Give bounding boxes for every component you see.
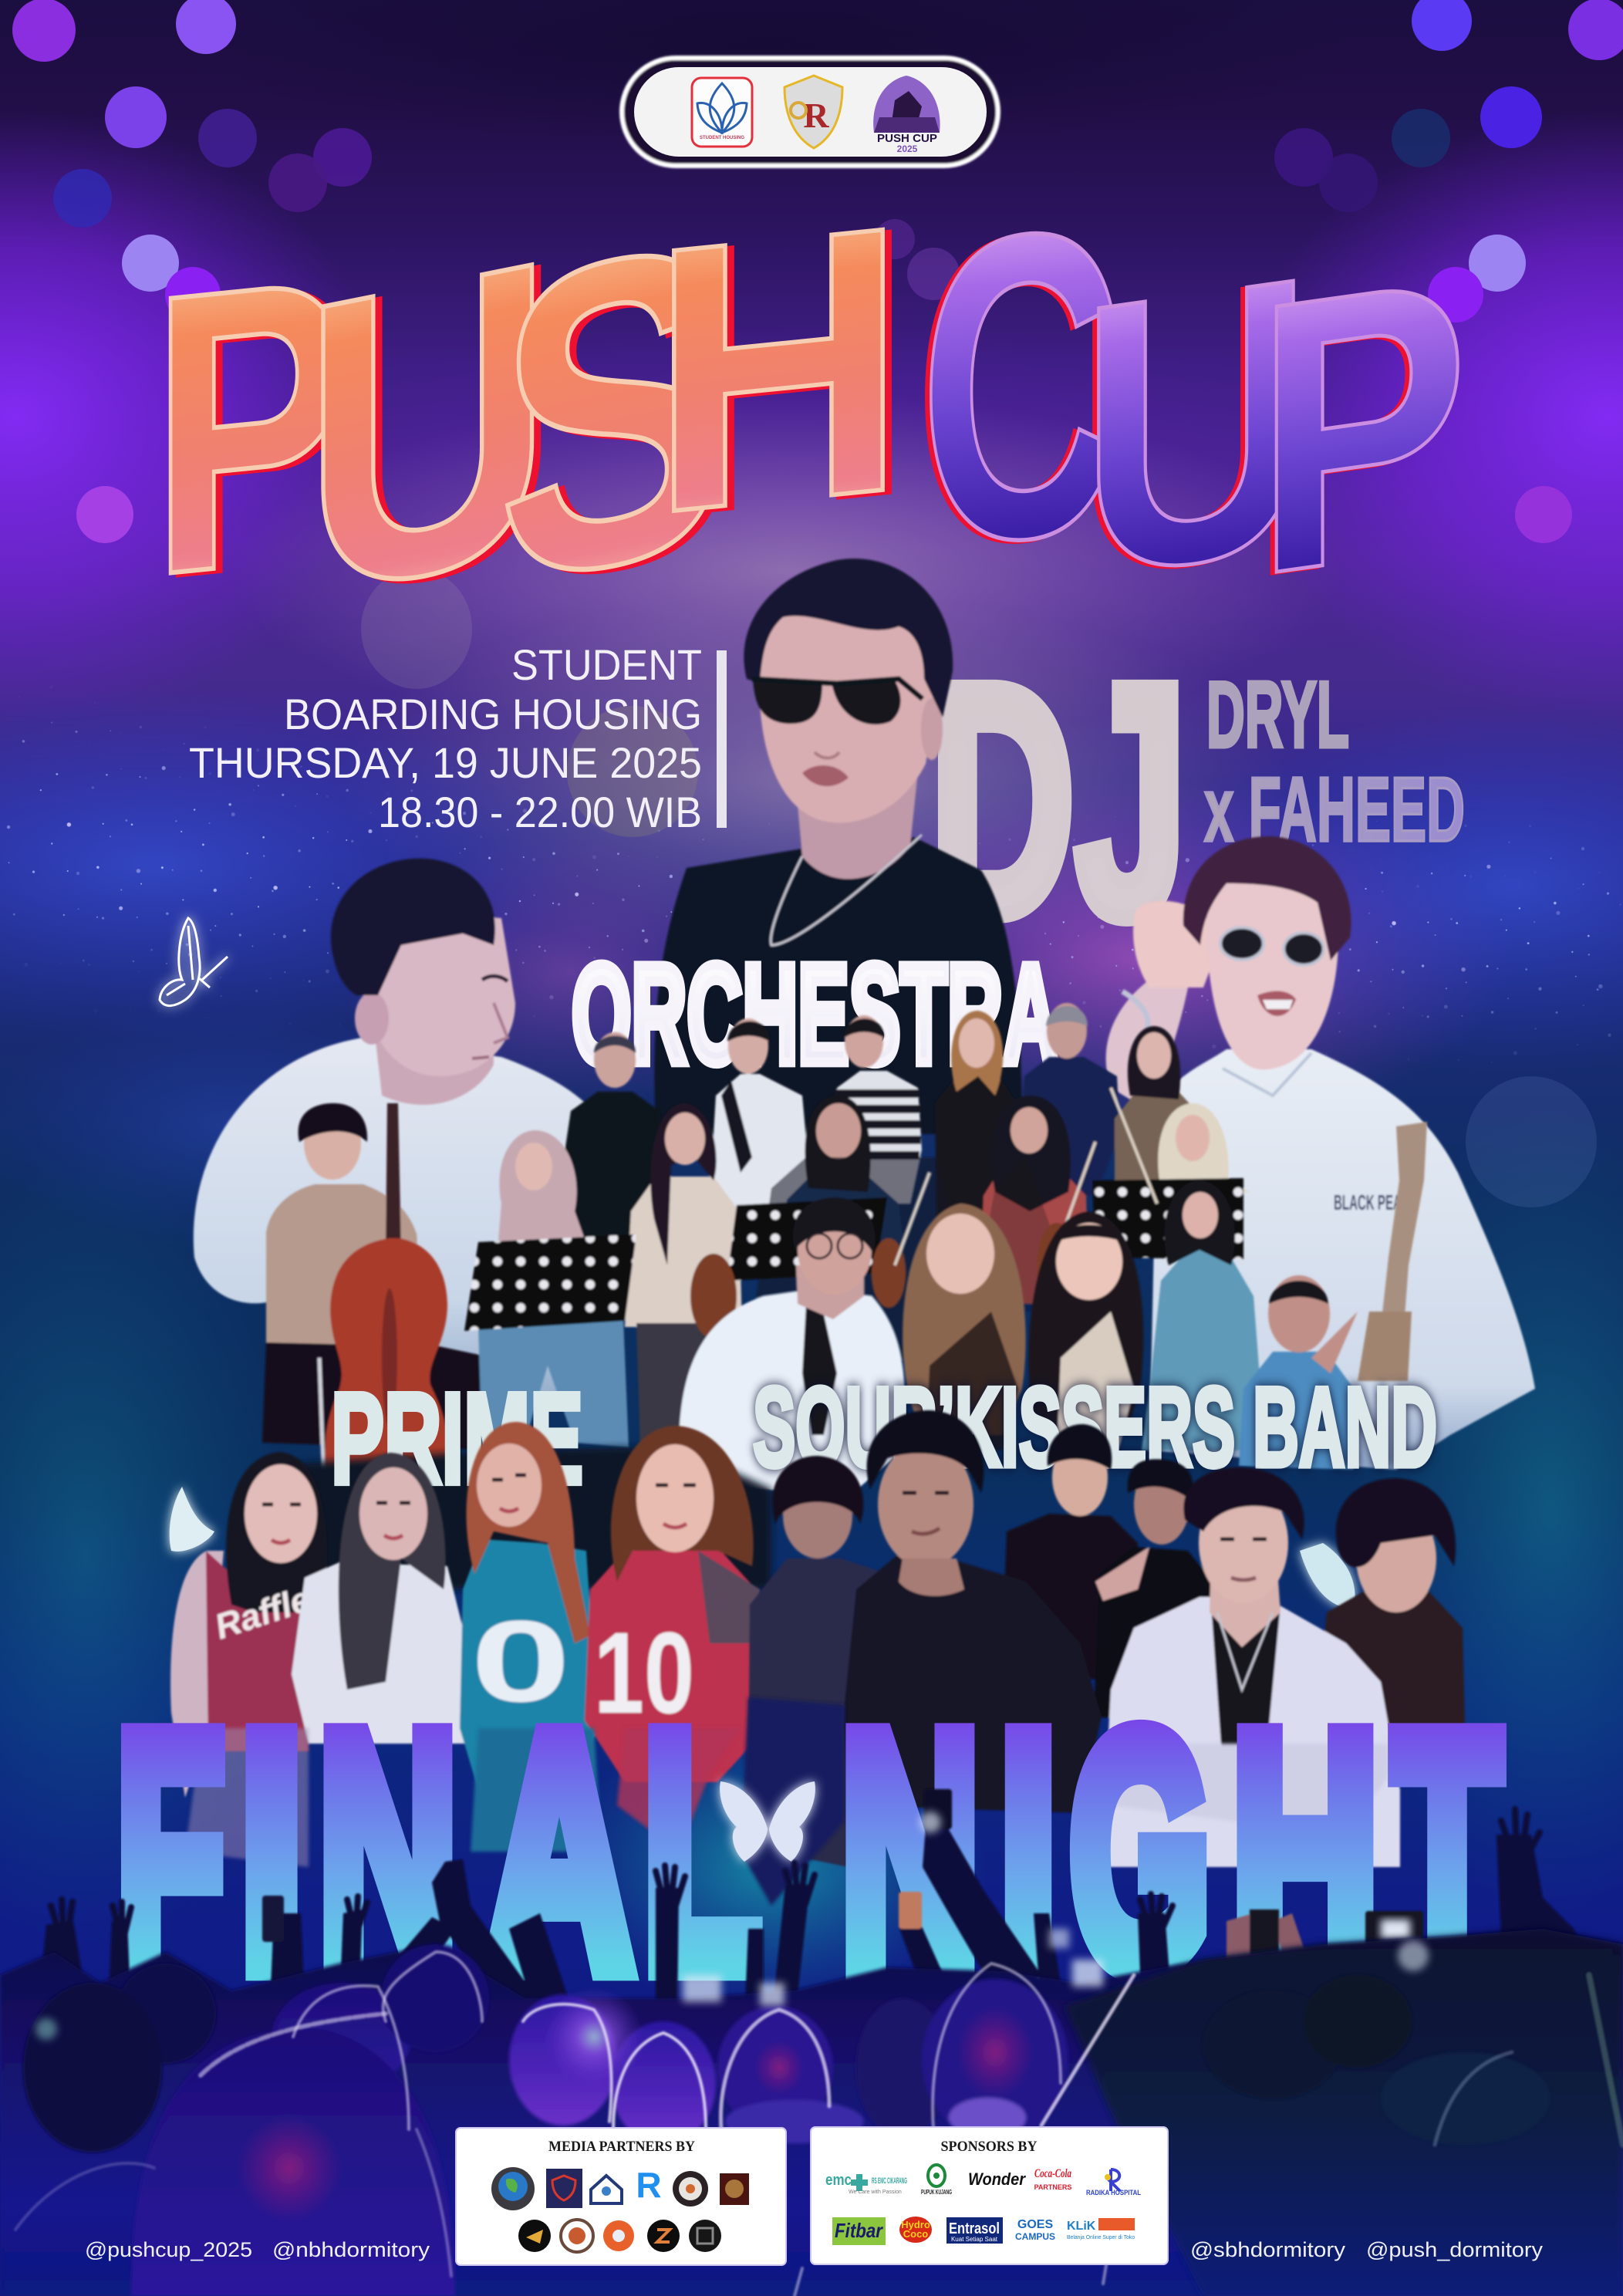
heading: FINAL NIGHT: H (1231, 1664, 1379, 2039)
violins (690, 1088, 1157, 1339)
member 4 (585, 1426, 760, 1782)
heading: SOUR'KISSERS BAND: SOUR’KISSERS BAND (753, 1364, 1437, 1491)
panel: sponsors (811, 2127, 1168, 2264)
member 3 (460, 1422, 598, 1790)
bass guitar (1358, 1122, 1427, 1381)
heading: FINAL NIGHT: G (1070, 1665, 1210, 2039)
crowd right darker mass (1065, 1929, 1623, 2296)
event details: STUDENT (511, 640, 702, 689)
name: DRYL: DRYL (1206, 662, 1349, 767)
member 4 (1094, 1459, 1219, 1728)
social handles: @nbhdormitory (272, 2238, 430, 2261)
sponsor logos: Coco (903, 2228, 928, 2240)
member 1: Raffles (210, 1572, 334, 1647)
heading: PRIME: PRIME (331, 1367, 583, 1511)
icon: pale butterfly right (1300, 1543, 1355, 1609)
logo: push cup badge (873, 76, 940, 154)
heading: FINAL NIGHT: I (999, 1663, 1058, 2039)
name: x FAHEED: x FAHEED (1204, 759, 1465, 861)
member 3 (1001, 1424, 1142, 1682)
cello player (262, 1103, 501, 1450)
crowd arms and phones (39, 1789, 1623, 2160)
member 1 (748, 1456, 910, 1867)
heading: FINAL NIGHT: N (841, 1665, 980, 2039)
cello (319, 1103, 448, 1489)
front singers (903, 1204, 1143, 1450)
sponsor logos: Wonder (968, 2169, 1026, 2189)
photo: left performer in white tee (194, 859, 609, 1412)
crowd (0, 1789, 1623, 2296)
sponsor logos: RS EMC CIKARANG (872, 2176, 907, 2186)
heading: sponsors: SPONSORS BY (941, 2139, 1038, 2155)
sponsor logos: PARTNERS (1034, 2183, 1071, 2191)
back row musicians (562, 1003, 1207, 1265)
photo: PRIME girl group (170, 1422, 760, 1798)
title word: PUSH: H (650, 145, 906, 593)
icon: centre butterfly (720, 1781, 815, 1862)
sponsor logos: GOES (1017, 2218, 1053, 2231)
member 3: 0 (471, 1596, 571, 1726)
panel: media partners (456, 2128, 786, 2265)
icon: pale butterfly left (170, 1487, 214, 1551)
divider bar (717, 650, 727, 828)
sponsor logos: Kuat Setiap Saat (951, 2236, 998, 2243)
member 6 (1316, 1478, 1466, 1774)
title word: CUP (919, 136, 1469, 659)
logo: student housing lotus (692, 78, 752, 147)
crowd rim lights (15, 1952, 1623, 2296)
heading: FINAL NIGHT: A (485, 1664, 633, 2039)
media partner logos: R (636, 2165, 662, 2205)
raised hand fingers (51, 1809, 1540, 1936)
sponsor logos (825, 2165, 1141, 2245)
logo: student housing lotus: STUDENT HOUSING (700, 136, 744, 140)
social handles: @sbhdormitory (1190, 2238, 1346, 2261)
heading: FINAL NIGHT: I (239, 1665, 304, 2039)
title: PUSH CUP (150, 136, 1469, 684)
logo: push cup badge: PUSH CUP (877, 132, 937, 145)
heading: FINAL NIGHT: N (319, 1665, 457, 2039)
seated legs and jeans (478, 1319, 744, 1450)
heading: FINAL NIGHT (116, 1663, 1501, 2039)
sponsor logos: Belanja Online Super di Toko (1067, 2235, 1135, 2240)
event details: THURSDAY, 19 JUNE 2025 (189, 738, 702, 787)
logo: push cup badge: 2025 (897, 144, 918, 154)
icon: outlined butterfly (160, 918, 228, 1006)
shirt and tie soloist (679, 1197, 905, 1497)
DJ lineup text (930, 616, 1465, 985)
event details: BOARDING HOUSING (284, 690, 702, 738)
photo: right performer in white shirt (1106, 836, 1535, 1470)
member 2 (843, 1410, 1102, 1813)
dark seating backdrop (262, 1447, 771, 1589)
photo: Sour'Kissers Band (748, 1410, 1466, 1867)
lower bodies (185, 1697, 1388, 1906)
social handles (85, 2238, 1544, 2261)
logo: shield: R (803, 96, 829, 135)
heading: media partners: MEDIA PARTNERS BY (548, 2139, 695, 2155)
photo: orchestra group (262, 1003, 1427, 1497)
media partner logos (491, 2165, 749, 2252)
sponsor logos: We Care with Passion (849, 2190, 902, 2195)
music stands (464, 1178, 1243, 1331)
phone screens glow (35, 1811, 1429, 2040)
sponsor logos: RADIKA HOSPITAL (1086, 2189, 1141, 2196)
photo: DJ Dryl (654, 559, 1022, 1134)
logo: shield (785, 76, 842, 148)
crowd heads (23, 1944, 1550, 2296)
sponsor logos: Coca-Cola (1034, 2167, 1071, 2180)
heading: DJ: DJ (930, 616, 1187, 985)
social handles: @pushcup_2025 (85, 2238, 252, 2261)
photo: right performer in white shirt: BLACK PEARL (1334, 1190, 1417, 1214)
member 2 (292, 1453, 467, 1744)
title word: CUP: P (1255, 195, 1469, 657)
logo pill (622, 58, 998, 166)
heading: FINAL NIGHT: T (1393, 1663, 1501, 2039)
title word: PUSH: S (498, 149, 729, 677)
pointing man (1239, 1275, 1358, 1470)
sponsor logos: Entrasol (949, 2220, 1000, 2237)
event details (189, 640, 702, 836)
title word: CUP: U (1079, 195, 1313, 659)
bokeh lights (12, 0, 1623, 1207)
title word: CUP: C (919, 136, 1122, 639)
title word: PUSH: P (150, 194, 351, 660)
member 4: 10 (594, 1608, 694, 1737)
sponsor logos: CAMPUS (1015, 2231, 1055, 2242)
second row musicians (498, 1096, 1250, 1366)
heading: FINAL NIGHT: L (643, 1665, 761, 2039)
sponsor logos: PUPUK KUJANG (921, 2189, 952, 2196)
event details: 18.30 - 22.00 WIB (378, 788, 702, 836)
heading: FINAL NIGHT: F (116, 1663, 224, 2039)
social handles: @push_dormitory (1366, 2238, 1544, 2261)
plaid dress singer (1142, 1180, 1281, 1450)
sponsor logos: Hydro (901, 2219, 930, 2230)
sponsor logos: KLiK (1067, 2220, 1096, 2233)
member 1 (170, 1452, 334, 1798)
sponsor logos: emc (825, 2172, 852, 2189)
sponsor logos: Fitbar (835, 2219, 884, 2242)
member 5 (1095, 1467, 1400, 1867)
heading: ORCHESTRA: ORCHESTRA (572, 936, 1058, 1093)
crowd mass (0, 1929, 1623, 2296)
title word: PUSH (150, 145, 906, 684)
title word: PUSH: U (302, 171, 553, 684)
